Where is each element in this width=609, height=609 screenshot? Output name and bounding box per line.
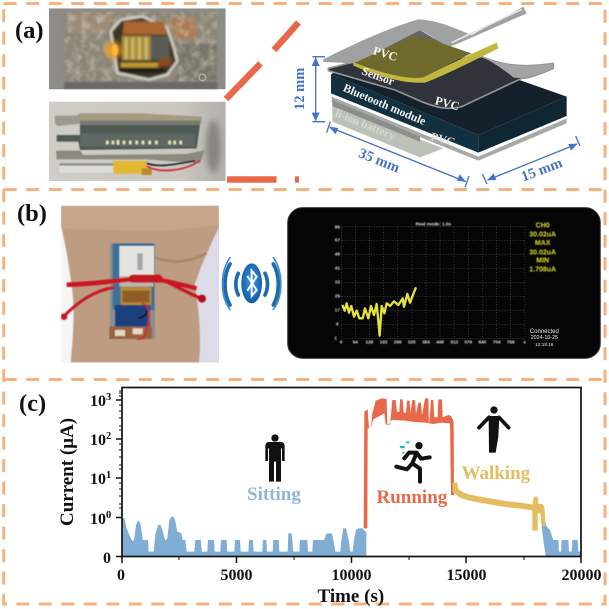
y axis tick labels: 10 [90,511,106,528]
layer: sensor: Sensor [360,65,396,88]
icon: running person [396,441,430,482]
y axis tick labels [90,392,111,567]
chart labels: 384 [422,340,430,345]
chart labels: 576 [464,340,473,345]
chart labels: 640 [478,340,487,345]
panel (c): current versus time chart [19,388,602,607]
layer: li-ion battery: li-ion battery [333,108,397,143]
layer: bluetooth module [331,43,567,153]
layer: li-ion battery [332,100,443,157]
panel (b): wireless readout [17,200,600,363]
y axis tick labels: 2 [106,431,111,442]
chart labels: 256 [394,340,402,345]
x axis tick labels: 20000 [562,567,602,584]
heading: (c): (c) [19,390,46,417]
connection status: 2024-10-25 [531,335,558,341]
chart labels: 704 [493,340,501,345]
chart labels: 448 [436,340,444,345]
y axis tick labels: 10 [90,432,106,449]
readout values [529,222,556,274]
readout values: 30.02uA [529,249,556,256]
readout values: 1.708uA [529,267,556,274]
label: Running: Running [376,487,448,508]
readout values: CH0 [536,222,550,229]
chart labels: 17 [335,307,340,312]
photo: device strapped on wrist [61,206,219,363]
chart labels: 65 [335,224,340,229]
connection status [530,329,559,347]
heading: (b): (b) [17,200,47,227]
chart labels: 41 [335,265,340,270]
x axis tick labels [117,567,602,584]
dimension: 12 mm [312,57,325,122]
icon: walking person [479,406,509,453]
y axis tick labels: 10 [90,393,106,410]
series: sitting, blue, right part [542,520,581,556]
layer: lower PVC [332,97,567,161]
chart labels: 49 [335,252,340,257]
chart labels: s [523,340,526,345]
series: walking, yellow [454,483,546,531]
chart labels: 9 [336,321,339,326]
x axis tick labels: 5000 [220,567,252,584]
label: PVC top: PVC [371,43,399,64]
label: Bluetooth module: Bluetooth module [341,81,428,128]
dimension: 35 mm [327,122,469,187]
chart grid [342,227,525,338]
panel (a): device and exploded view [15,7,580,187]
connector lines: orange zoom indicators [226,22,299,180]
label: PVC middle: PVC [434,93,461,113]
heading: (a): (a) [15,17,44,44]
chart labels [334,221,526,345]
readout values: 30.02uA [529,232,556,239]
connection status: 12:18:16 [535,342,554,347]
chart labels: 33 [335,279,340,284]
y axis title: Current (μA) [57,418,78,526]
x axis tick labels: 15000 [446,567,486,584]
connection status: Connected [530,329,559,335]
readout values: MAX [535,240,551,247]
chart labels: Real mode: 1.0s [416,221,451,226]
chart labels: 768 [507,340,515,345]
chart labels: 0 [340,340,343,345]
dimension: 15 mm [482,136,580,185]
x axis title: Time (s) [318,586,384,607]
dimension: 15 mm: 15 mm [519,155,565,185]
label: PVC bottom: PVC [429,129,457,149]
chart labels: 1 [334,336,337,341]
chart labels: 512 [450,340,459,345]
chart labels: 192 [380,340,388,345]
y axis tick labels: 0 [103,550,111,567]
phone: real-time current display [288,208,600,358]
y axis tick labels: 3 [106,392,111,403]
layer: middle PVC sheet [328,57,553,108]
chart labels: 64 [353,340,358,345]
icon: bluetooth signal [222,258,281,309]
dimension: 35 mm: 35 mm [356,146,402,176]
x axis tick labels: 10000 [332,567,372,584]
series: sitting, blue, main part [122,516,366,557]
x axis tick labels: 0 [117,567,125,584]
chart labels: 57 [335,238,340,243]
y axis tick labels: 1 [106,470,111,481]
y axis tick labels: 0 [106,510,111,521]
label: Walking: Walking [462,463,531,484]
photo: internal module side view [49,102,226,181]
diagram: exploded layer stack [312,7,580,187]
chart labels: 128 [365,340,374,345]
label: Sitting: Sitting [247,484,301,505]
y axis tick labels: 10 [90,471,106,488]
photo: encapsulated device top view [49,8,226,89]
chart labels: 25 [335,293,340,298]
series: running, red [364,398,454,528]
chart trace [342,287,416,336]
chart axes [116,388,581,563]
layer: sensor [353,37,498,88]
layer: top PVC sheet [323,7,527,63]
icon: sitting person [265,434,285,482]
chart labels: 320 [408,340,416,345]
dimension label: 12 mm: 12 mm [292,68,308,110]
readout values: MIN [536,258,549,265]
